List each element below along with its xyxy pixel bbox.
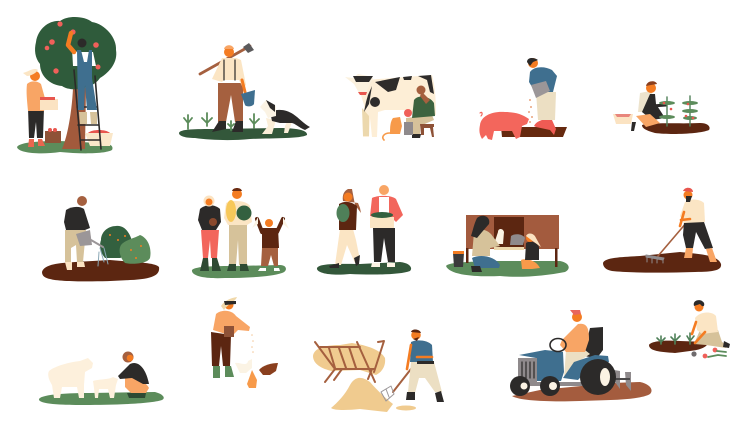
woman: [471, 216, 500, 272]
scene: feeding pigs: [479, 58, 567, 140]
gardener with can: [64, 196, 103, 270]
hay in rack: [313, 343, 385, 375]
ladder: [74, 70, 101, 150]
trowel: [691, 351, 697, 357]
chicken feed: [251, 334, 254, 353]
steering wheel: [550, 338, 566, 352]
orange hen: [247, 370, 257, 388]
ground: [317, 262, 411, 275]
feed falling: [528, 99, 533, 123]
seedlings: [657, 333, 694, 344]
light bush: [120, 235, 151, 264]
hay rack: [315, 341, 384, 382]
tomato basket: [613, 114, 633, 124]
scene: woman with sheep: [39, 352, 164, 405]
dark bush: [100, 226, 132, 258]
farmer: [212, 45, 246, 132]
ground: [192, 265, 286, 278]
basket of apples: [85, 130, 113, 146]
hay pile: [331, 378, 393, 412]
man with crate: [370, 185, 403, 267]
scene: couple with watermelons: [317, 185, 411, 275]
small hay: [396, 406, 416, 410]
woman with watermelon: [329, 189, 361, 268]
soil: [603, 252, 721, 273]
scene: apple picking: [17, 17, 116, 153]
rabbits: [494, 229, 525, 245]
milker: [404, 86, 435, 138]
father: [224, 188, 252, 271]
soil: [42, 260, 159, 281]
scene: watering seedlings: [42, 196, 159, 281]
gardener: [631, 81, 666, 131]
tree trunk: [62, 88, 86, 149]
soil: [649, 341, 708, 353]
adult sheep: [48, 358, 93, 398]
man: [406, 329, 444, 402]
woman: [211, 297, 250, 378]
ground: [446, 261, 569, 277]
scene: hay and pitchfork: [313, 329, 444, 412]
tree canopy: [35, 17, 116, 89]
scene: feeding chickens: [211, 297, 278, 388]
pitchfork: [381, 360, 418, 401]
scene: planting seedlings: [649, 300, 730, 358]
soil: [512, 382, 652, 401]
soil: [642, 123, 710, 134]
rake: [646, 222, 687, 263]
seedlings: [184, 113, 259, 130]
scene: raking soil: [603, 188, 721, 273]
scene: milking a cow: [345, 74, 436, 140]
man: [680, 188, 717, 262]
scene: family with harvest: [192, 188, 289, 278]
bush berries: [109, 234, 142, 259]
big pig: [479, 112, 529, 140]
grandmother: [198, 196, 221, 271]
woman with box: [23, 69, 58, 147]
cat: [383, 117, 402, 140]
scene: feeding rabbits: [446, 215, 569, 277]
small pig: [534, 119, 556, 135]
water bucket: [241, 90, 255, 106]
man in overalls: [68, 33, 97, 124]
brown hen: [259, 363, 278, 375]
crouching woman: [118, 352, 149, 398]
apples on tree: [45, 21, 100, 74]
water drops: [98, 248, 108, 266]
crate of apples: [45, 128, 61, 143]
girl: [521, 234, 541, 269]
white hen: [235, 359, 252, 373]
dog: [260, 100, 310, 134]
tiller: [612, 370, 631, 391]
tractor seat: [583, 327, 603, 358]
child: [252, 217, 289, 271]
scene: farmer with hoe and dog: [179, 43, 310, 140]
man with bucket: [527, 58, 557, 120]
hoe: [200, 43, 254, 74]
tractor wheels: [510, 359, 616, 396]
bucket of carrots: [453, 251, 464, 267]
hutch: [466, 215, 559, 267]
ground: [179, 128, 307, 140]
driver: [560, 310, 590, 378]
ground: [17, 141, 112, 153]
scene: tomato plants: [613, 81, 710, 134]
tractor body: [518, 350, 609, 386]
pulled radishes: [703, 348, 726, 358]
trough: [501, 127, 567, 137]
gardener: [692, 300, 730, 348]
ground: [39, 392, 164, 405]
cow: [345, 74, 436, 137]
scene: tractor: [510, 310, 652, 401]
tomato plants: [659, 96, 698, 126]
lamb: [93, 377, 118, 398]
